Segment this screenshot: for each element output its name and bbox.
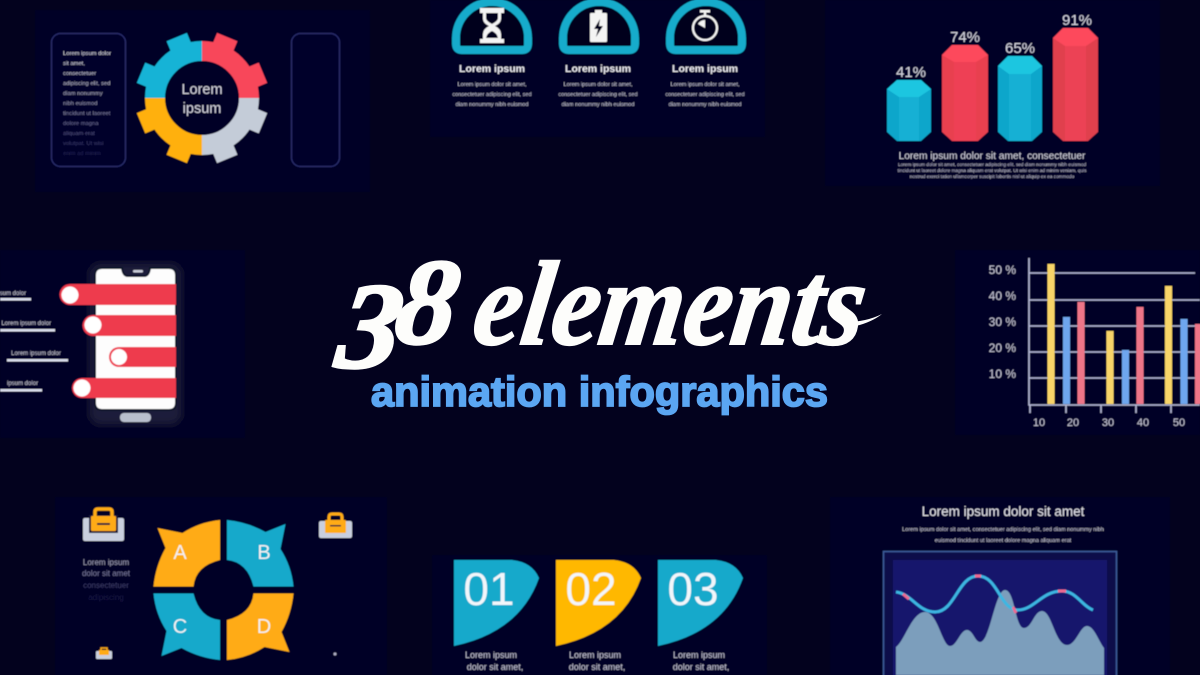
headline: 38 elements: 8 [388, 235, 467, 370]
bar 41% [887, 64, 931, 141]
line series [896, 576, 1093, 612]
tab 03: 03 [667, 563, 719, 615]
feature: hourglass: consectetuer adipiscing elit, sed [452, 92, 532, 98]
chart plot area [893, 560, 1107, 675]
x axis labels: 50 [1173, 417, 1185, 429]
gear segment: cyan [137, 33, 202, 98]
segment D [227, 594, 294, 660]
list row 3 [7, 347, 176, 367]
x axis labels: 30 [1102, 417, 1114, 429]
feature: hourglass [452, 2, 532, 108]
chart caption: nostrud exerci tation ullamcorper suscipit lobortis nisl ut aliquip ex ea commodo [910, 174, 1075, 179]
chart description: euismod tincidunt ut laoreet dolore magna aliquam erat [935, 538, 1072, 544]
headline: 38 elements [329, 235, 882, 394]
y axis labels: 30 % [989, 315, 1016, 329]
gear label: Lorem [181, 82, 223, 98]
y axis labels: 50 % [989, 263, 1016, 277]
tab 03: dolor sit amet, [673, 662, 729, 672]
segment C [154, 594, 220, 660]
panel: three feature icons [430, 0, 765, 137]
feature: hourglass: diam nonummy nibh euismod [455, 102, 529, 108]
icon: battery [590, 10, 607, 42]
side caption: dolor sit amet [82, 569, 131, 578]
tab 02: Lorem ipsum [569, 650, 621, 660]
segment B [227, 520, 294, 586]
panel: 3D bar chart [825, 0, 1160, 186]
x axis labels: 40 [1137, 417, 1149, 429]
panel: area and line chart [830, 497, 1170, 675]
feature: battery: Lorem ipsum [565, 63, 631, 75]
segment letters: B [257, 542, 271, 564]
gear segment: red [202, 33, 267, 98]
headline: 38 elements: elements [466, 239, 875, 371]
x axis labels [1033, 417, 1185, 429]
headline swash [842, 314, 882, 327]
tab 02 [556, 560, 641, 672]
segment A [154, 520, 220, 586]
list row 4: ipsum dolor [7, 381, 38, 387]
chart description [902, 527, 1104, 544]
segment letters [173, 542, 271, 638]
icon: case small [96, 648, 112, 659]
left text card: tincidunt ut laoreet [63, 111, 111, 117]
x axis labels: 20 [1067, 417, 1079, 429]
tab 03 [658, 560, 743, 672]
list row 4 [0, 378, 176, 398]
chart description: Lorem ipsum dolor sit amet, consectetuer adipiscing elit, sed diam nonummy nibh [902, 527, 1104, 533]
y axis labels [989, 263, 1016, 381]
right empty card [292, 34, 340, 166]
gear label [181, 82, 223, 117]
left text card: dolore magna [63, 121, 99, 127]
icon: stopwatch [693, 10, 717, 40]
chart caption: Lorem ipsum dolor sit amet, consectetuer adipiscing elit, sed diam nonummy nibh euismod [898, 162, 1086, 167]
panel: ABCD ring [55, 497, 387, 675]
y axis labels: 40 % [989, 289, 1016, 303]
tab 02: 02 [565, 563, 617, 615]
left text card [52, 34, 126, 166]
panel: numbered tabs [432, 555, 767, 675]
feature: battery [558, 2, 638, 108]
phone screen [95, 268, 176, 410]
feature: stopwatch: consectetuer adipiscing elit, sed [665, 92, 745, 98]
phone camera [133, 270, 143, 272]
side caption: Lorem ipsum [83, 558, 129, 567]
feature: stopwatch: Lorem ipsum dolor sit amet, [670, 82, 740, 88]
icon: hourglass [480, 8, 504, 43]
list row 3: Lorem ipsum dolor [11, 351, 61, 357]
feature: hourglass: Lorem ipsum [459, 63, 525, 75]
left text card: volutpat. Ut wisi [63, 141, 104, 147]
left text card: consectetuer [63, 71, 96, 77]
panel: gear diagram [35, 10, 370, 192]
segment letters: A [173, 542, 187, 564]
icon: case large [83, 509, 124, 541]
grid and axes [1029, 258, 1200, 413]
chart caption [898, 151, 1087, 179]
segment letters: C [173, 616, 187, 638]
chart heading: Lorem ipsum dolor sit amet [922, 504, 1085, 519]
home button [120, 413, 151, 422]
bars [1048, 264, 1200, 404]
list row 1 [0, 284, 176, 305]
bar 41%: 41% [896, 64, 926, 81]
phone glow [90, 264, 181, 424]
tab 01 [454, 560, 539, 672]
gear chart [137, 33, 267, 163]
left text card: enim ad minim [63, 151, 101, 157]
tab 03: Lorem ipsum [673, 650, 725, 660]
left text card: adipiscing elit, sed [63, 81, 110, 87]
bar 91%: 91% [1062, 12, 1092, 29]
y axis labels: 10 % [989, 367, 1016, 381]
list row 2: Lorem ipsum dolor [1, 321, 51, 327]
left text card: Lorem ipsum dolor [63, 51, 111, 57]
gear label: ipsum [183, 101, 221, 117]
small dot [334, 652, 336, 656]
chart caption: tincidunt ut laoreet dolore magna aliquam erat volutpat. Ut wisi enim ad minim veniam, quis [898, 168, 1087, 173]
line highlights [903, 576, 1066, 613]
segment letters: D [257, 616, 271, 638]
y axis labels: 20 % [989, 341, 1016, 355]
bar 65%: 65% [1005, 40, 1035, 57]
side caption: consectetuer [83, 581, 129, 590]
feature: stopwatch: diam nonummy nibh euismod [668, 102, 742, 108]
headline: 38 elements: 3 [329, 259, 411, 394]
panel: right bar chart [955, 250, 1200, 435]
feature: battery: diam nonummy nibh euismod [561, 102, 635, 108]
x axis labels: 10 [1033, 417, 1045, 429]
feature: stopwatch [665, 2, 745, 108]
chart caption: Lorem ipsum dolor sit amet, consectetuer [899, 151, 1086, 162]
icon: case medium [319, 514, 352, 538]
list row 2 [0, 315, 176, 336]
left text card: sit amet, [63, 61, 85, 67]
feature: hourglass: Lorem ipsum dolor sit amet, [457, 82, 527, 88]
bar 74%: 74% [950, 29, 980, 46]
bar 91% [1053, 12, 1098, 141]
area series [896, 590, 1104, 675]
chart frame [884, 552, 1116, 675]
panel: phone list [0, 250, 245, 438]
left text card: diam nonummy [63, 91, 103, 97]
feature: stopwatch: Lorem ipsum [672, 63, 738, 75]
feature: battery: consectetuer adipiscing elit, sed [558, 92, 638, 98]
tab 01: 01 [463, 563, 515, 615]
side caption: adipiscing [88, 593, 124, 602]
tab 01: Lorem ipsum [465, 650, 517, 660]
side caption [82, 558, 131, 602]
tab 02: dolor sit amet, [569, 662, 625, 672]
gear segment: grey [202, 98, 267, 163]
left text card: aliquam erat [63, 131, 95, 137]
left text card: nibh euismod [63, 101, 97, 107]
subtitle: animation infographics [371, 368, 828, 415]
gear segment: orange [137, 98, 202, 163]
bar 74% [942, 29, 988, 141]
feature: battery: Lorem ipsum dolor sit amet, [563, 82, 633, 88]
tab 01: dolor sit amet, [467, 662, 523, 672]
bar 65% [998, 40, 1042, 141]
